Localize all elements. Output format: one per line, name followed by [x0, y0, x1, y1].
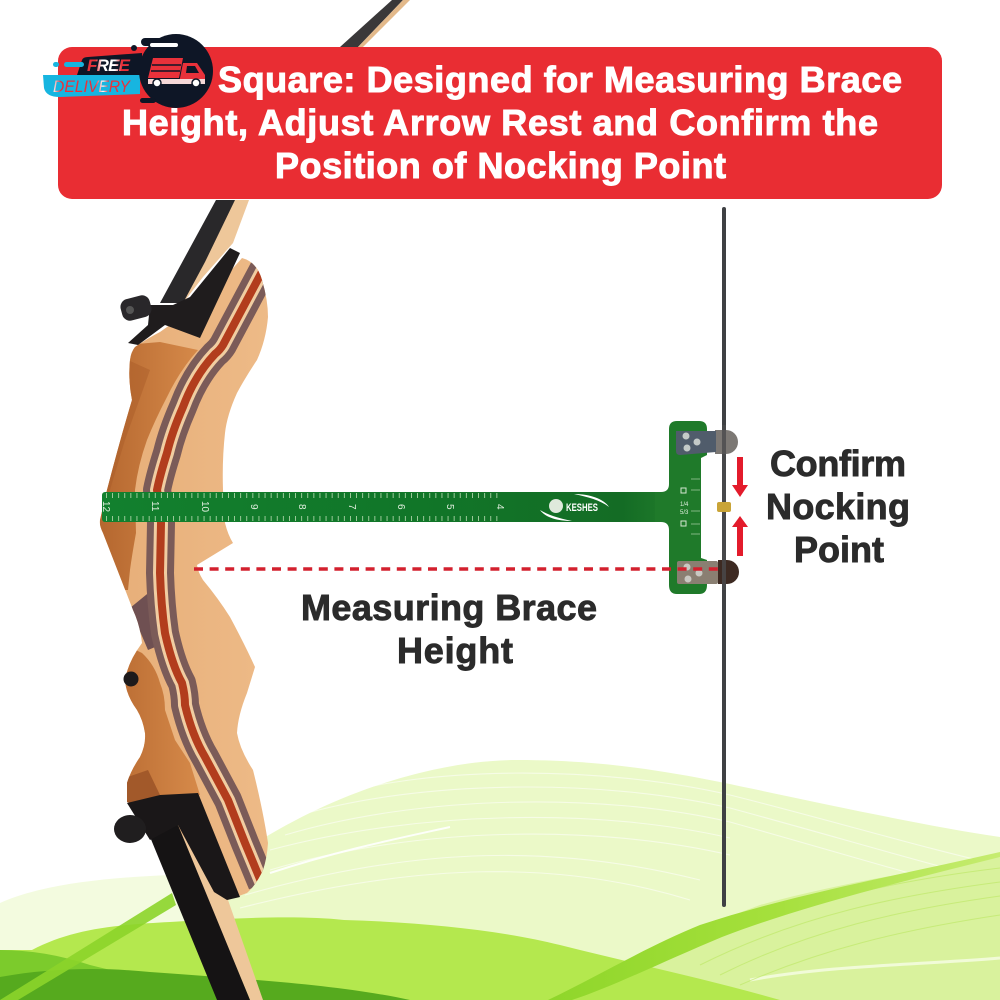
- arrow: down to nocking point: [732, 457, 748, 497]
- Keshes logo: [540, 494, 609, 521]
- T head: [655, 421, 707, 594]
- label: confirm nocking point: [766, 443, 910, 570]
- dotted line: brace height: [194, 567, 718, 571]
- grip screw: [124, 672, 138, 686]
- label: measuring brace height: [301, 587, 597, 671]
- pale wave left: [0, 875, 300, 1000]
- dark patch at lower lobe: [127, 770, 160, 802]
- head scale: 5/3: [680, 510, 689, 516]
- ruler numbers: 8: [296, 504, 307, 510]
- string over clips: [722, 425, 726, 590]
- background: green waves: [0, 740, 1000, 1000]
- T-square tool: [100, 421, 739, 594]
- pale wave large: [150, 760, 1000, 1000]
- riser: laminated wood handle: [100, 258, 268, 900]
- darker shaded wood, upper: [100, 342, 198, 590]
- bow string: [722, 207, 726, 907]
- ruler numbers: 12: [100, 501, 111, 513]
- label: measuring brace height: Height: [397, 630, 513, 671]
- mid green wave: [0, 917, 780, 1000]
- lower knob: [114, 815, 146, 843]
- upper bow limb: [160, 0, 410, 303]
- label: confirm nocking point: Point: [794, 529, 884, 570]
- darkest green wave: [0, 969, 410, 1000]
- heading text: Height, Adjust Arrow Rest and Confirm the: [122, 102, 878, 143]
- heading text: [122, 59, 902, 186]
- brass nocking point: [717, 502, 731, 512]
- Keshes logo: KESHES: [566, 502, 598, 514]
- blue delivery band: [43, 75, 140, 97]
- head scale: [680, 479, 700, 534]
- navy circle: [139, 34, 213, 108]
- top slider clip: [676, 430, 738, 455]
- head scale: 1/4: [680, 502, 689, 508]
- ruler numbers: 9: [248, 504, 259, 510]
- heading text: Square: Designed for Measuring Brace: [218, 59, 902, 100]
- lower bow limb: [114, 793, 263, 1000]
- lamination stripes: [157, 268, 264, 884]
- ruler numbers: 4: [494, 504, 505, 510]
- green ribbon right: [548, 852, 1000, 1000]
- light wave right: [548, 857, 1000, 1000]
- wave lines: [240, 773, 1000, 908]
- dark green wave: [0, 950, 230, 1000]
- bottom slider clip: [677, 560, 739, 584]
- dark facet on upper wood: [106, 361, 150, 492]
- ruler numbers: [100, 501, 505, 513]
- ruler numbers: 6: [395, 504, 406, 510]
- label: confirm nocking point: Confirm: [770, 443, 906, 484]
- arrow: up to nocking point: [732, 516, 748, 556]
- free delivery badge: [43, 34, 213, 108]
- darker shaded wood, lower: [125, 650, 200, 802]
- truck icon: [148, 58, 205, 87]
- ruler numbers: 10: [199, 501, 210, 513]
- speed dashes: [53, 38, 178, 103]
- green ribbon left: [0, 893, 176, 1000]
- free text: FREE: [87, 56, 131, 75]
- wood base: [100, 258, 268, 900]
- ruler numbers: 11: [149, 501, 160, 512]
- ruler numbers: 5: [444, 504, 455, 510]
- ruler ticks: [106, 496, 502, 518]
- label: confirm nocking point: Nocking: [766, 486, 910, 527]
- label: measuring brace height: Measuring Brace: [301, 587, 597, 628]
- ruler arm: [102, 492, 668, 522]
- top limb bracket and knob: [119, 248, 240, 345]
- ruler numbers: 7: [346, 504, 357, 510]
- dark free band: [77, 53, 142, 75]
- delivery text: DELIVERY: [53, 77, 132, 96]
- header banner: [58, 47, 942, 199]
- heading text: Position of Nocking Point: [275, 145, 726, 186]
- dark grain patch: [132, 594, 154, 650]
